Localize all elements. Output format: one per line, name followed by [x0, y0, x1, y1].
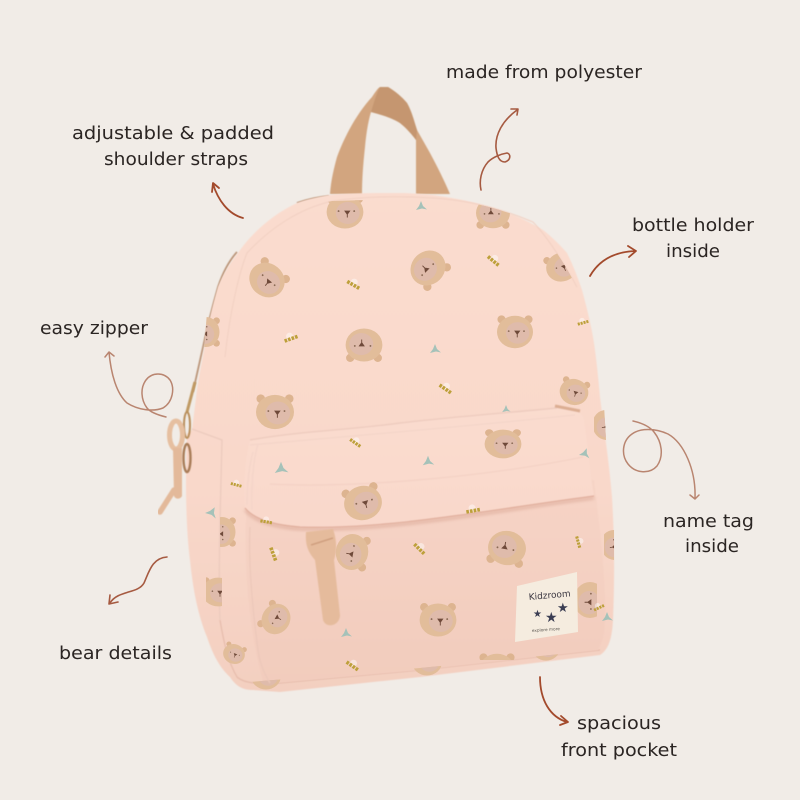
callout: bottle holder: bottle holder — [632, 215, 755, 236]
callout: shoulder straps: adjustable & padded — [72, 123, 274, 144]
callout: front pocket — [540, 677, 677, 761]
callout: easy zipper: easy zipper — [40, 318, 149, 339]
front pocket — [246, 480, 605, 684]
top handle — [330, 87, 450, 194]
top seam — [225, 197, 577, 357]
tagline: explore more — [532, 626, 561, 633]
star middle: ★ — [545, 610, 558, 626]
callout: name tag: inside — [685, 536, 739, 557]
side pocket edge — [192, 429, 222, 620]
callout: bear details: bear details — [59, 643, 172, 664]
bees and leaves print — [205, 201, 613, 670]
callout: made from polyester — [446, 62, 643, 190]
back strap edge — [193, 196, 329, 392]
zipper pull, side — [160, 382, 195, 512]
pocket flap — [244, 406, 594, 683]
callout: bottle holder — [590, 215, 755, 276]
stars: ★ — [533, 609, 542, 620]
callout: bear details — [59, 557, 172, 664]
brand name: Kidzroom — [528, 589, 571, 603]
flap and tab bears — [260, 429, 592, 573]
clipped edge bears — [192, 317, 630, 690]
callout: bottle holder: inside — [666, 241, 720, 262]
zipper tab, pocket — [306, 529, 340, 625]
brand label — [515, 572, 578, 642]
callout: made from polyester: made from polyester — [446, 62, 643, 83]
callout: shoulder straps: shoulder straps — [104, 149, 248, 170]
bottom seam — [220, 620, 600, 683]
callout: easy zipper — [40, 318, 173, 417]
bear print pattern — [220, 195, 591, 667]
star right: ★ — [557, 601, 569, 616]
callout: name tag — [623, 421, 754, 557]
flap shadow — [245, 498, 594, 529]
callout: front pocket: front pocket — [561, 740, 677, 761]
callout: shoulder straps — [72, 123, 274, 218]
main body — [186, 193, 614, 692]
callout: front pocket: spacious — [577, 713, 661, 734]
callout: name tag: name tag — [663, 511, 754, 532]
backpack — [160, 87, 630, 692]
